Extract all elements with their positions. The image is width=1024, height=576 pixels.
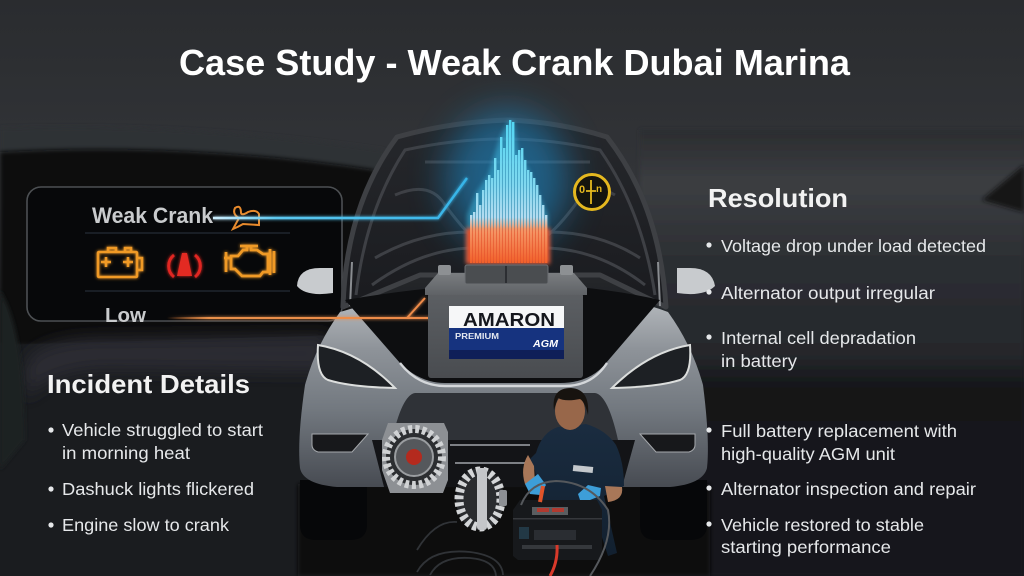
icon: alternator large xyxy=(382,423,448,493)
list: incident items: Engine slow to crank xyxy=(62,515,229,535)
icon: engine warning xyxy=(224,246,274,276)
icon: gauge badge xyxy=(574,174,610,210)
mechanic head xyxy=(555,392,585,430)
list: incident items: Dashuck lights flickered xyxy=(62,479,254,499)
headlights xyxy=(318,345,395,388)
list: repair items: Full battery replacement with xyxy=(721,421,957,441)
label: weak crank: Weak Crank xyxy=(92,203,214,228)
car xyxy=(297,120,715,576)
battery xyxy=(425,265,587,378)
icon: gauge badge: n xyxy=(596,184,602,195)
heading: incident details: Incident Details xyxy=(47,369,250,399)
battery: PREMIUM xyxy=(455,332,499,341)
cables xyxy=(417,522,503,576)
arrow: blue connector xyxy=(213,178,467,218)
battery label xyxy=(449,306,564,328)
panel: resolution xyxy=(706,183,986,557)
red clamp xyxy=(540,486,543,502)
list: diagnosis items: in battery xyxy=(721,351,797,371)
list: repair items: Alternator inspection and repair xyxy=(721,479,976,499)
list: diagnosis items: Internal cell depradation xyxy=(721,328,916,348)
icon: battery warning xyxy=(98,248,142,277)
panel: incident details xyxy=(47,369,263,535)
mechanic xyxy=(523,388,624,556)
icon: alternator small xyxy=(456,468,507,530)
list: diagnosis items: Alternator output irregular xyxy=(721,283,935,303)
orange heat block xyxy=(466,228,550,264)
chrome hood line xyxy=(400,363,607,386)
divider lines xyxy=(85,233,290,291)
car body xyxy=(299,290,708,487)
arrow: orange connector xyxy=(167,298,448,318)
gloves xyxy=(525,474,546,495)
red cable xyxy=(550,545,557,576)
panel: dashboard display xyxy=(27,187,342,327)
dashboard silhouette xyxy=(0,127,385,576)
list: repair items: high-quality AGM unit xyxy=(721,444,895,464)
test cables xyxy=(521,481,609,576)
mechanic arms xyxy=(523,455,622,502)
list: incident items xyxy=(48,420,263,535)
icon: gauge badge: 0 xyxy=(579,184,585,196)
glow behind spectrum xyxy=(445,110,569,250)
side mirrors xyxy=(297,268,333,294)
title: Case Study - Weak Crank Dubai Marina xyxy=(179,42,851,83)
list: diagnosis items: Voltage drop under load detected xyxy=(721,236,986,256)
engine bay xyxy=(345,284,660,383)
list: repair items: starting performance xyxy=(721,537,891,557)
chart: voltage spectrum xyxy=(470,120,547,263)
list: repair items xyxy=(706,421,976,557)
right cabin wall xyxy=(640,130,1024,576)
icon: brake warning xyxy=(169,253,200,277)
icon: seat warning xyxy=(233,207,259,229)
mechanic torso xyxy=(527,424,624,556)
hood struts xyxy=(350,262,660,306)
under-car shadow xyxy=(298,484,710,576)
battery tester xyxy=(513,481,609,576)
label: low: Low xyxy=(105,305,146,327)
spectrum envelope xyxy=(467,120,548,263)
list: repair items: Vehicle restored to stable xyxy=(721,515,924,535)
grille bars xyxy=(450,445,530,463)
battery: AGM xyxy=(532,338,558,350)
fog lights xyxy=(312,434,368,452)
tyres xyxy=(300,480,367,540)
lower grille xyxy=(372,440,635,487)
list: diagnosis items xyxy=(706,236,986,371)
open hood xyxy=(343,120,666,307)
right pillar xyxy=(982,165,1024,212)
list: incident items: in morning heat xyxy=(62,443,190,463)
hood ribs xyxy=(356,139,655,295)
shirt badge xyxy=(573,465,593,473)
battery: AMARON xyxy=(463,310,555,330)
central intake xyxy=(392,393,618,440)
heading: resolution: Resolution xyxy=(708,183,848,213)
list: incident items: Vehicle struggled to start xyxy=(62,420,263,440)
